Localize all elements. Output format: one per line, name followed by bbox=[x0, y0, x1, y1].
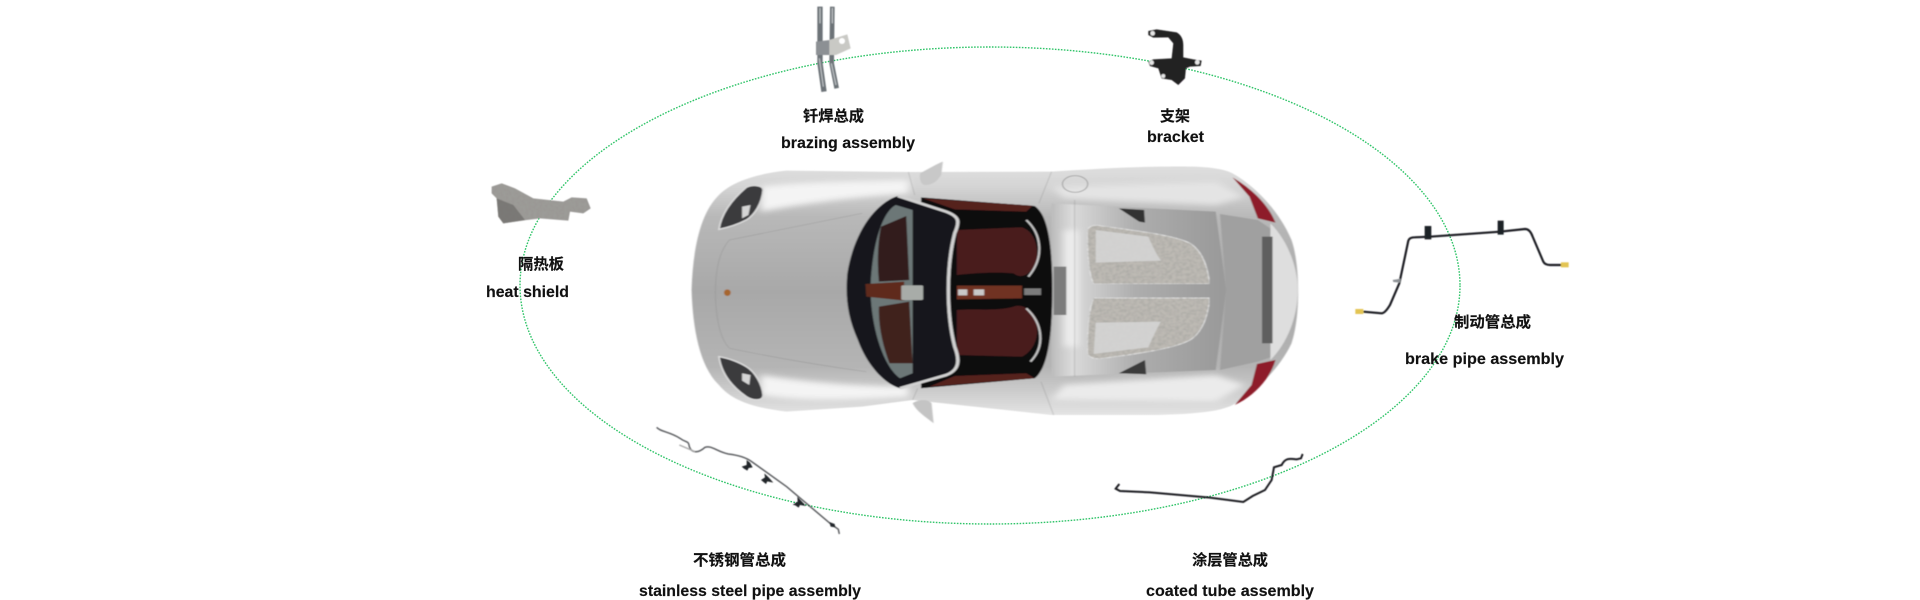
side clip bbox=[1393, 279, 1401, 283]
mounting tab bbox=[829, 34, 851, 55]
label: stainless steel pipe assembly: stainless steel pipe assembly bbox=[639, 583, 861, 600]
pipe run bbox=[1363, 229, 1562, 313]
bottom tail light bbox=[1235, 360, 1276, 405]
rear grille bbox=[1262, 237, 1273, 343]
red sill strips bbox=[923, 198, 1035, 387]
part: bracket bbox=[1148, 29, 1202, 85]
top headlight lens bbox=[742, 205, 751, 218]
roll hoop bottom bbox=[1026, 308, 1040, 362]
left connector bbox=[1355, 309, 1363, 314]
part: heat shield bbox=[492, 183, 591, 223]
label: brazing assembly: 钎焊总成 bbox=[803, 105, 864, 126]
shield shading bbox=[497, 198, 525, 223]
bottom headlight bbox=[719, 357, 763, 400]
car: top view sports car bbox=[692, 162, 1298, 423]
pipe branch bbox=[679, 445, 695, 452]
left tube bbox=[820, 7, 824, 92]
label: bracket bbox=[1147, 105, 1205, 146]
windshield glass side bbox=[870, 205, 913, 378]
badge bbox=[724, 289, 731, 296]
rear end bbox=[1270, 223, 1298, 360]
windshield frame bbox=[898, 196, 958, 388]
dotted green orbit ellipse bbox=[520, 47, 1460, 524]
label: brake pipe assembly: brake pipe assembly bbox=[1405, 351, 1564, 368]
right connector bbox=[1561, 262, 1569, 267]
label: brazing assembly bbox=[781, 105, 915, 152]
top seat bbox=[957, 227, 1037, 276]
top mirror bbox=[920, 162, 943, 185]
part: brake pipe bbox=[1355, 221, 1569, 314]
label: brazing assembly: brazing assembly bbox=[781, 135, 915, 152]
centre console bbox=[957, 286, 1022, 299]
label: coated tube assembly: coated tube assembly bbox=[1146, 583, 1314, 600]
top tail light bbox=[1233, 177, 1276, 223]
dash wedge bbox=[865, 282, 904, 301]
label: coated tube assembly: 涂层管总成 bbox=[1192, 549, 1268, 570]
bottom vent bbox=[1087, 298, 1209, 359]
pipe clips bbox=[1425, 221, 1504, 239]
top air slot bbox=[1119, 208, 1145, 223]
cockpit interior bbox=[921, 197, 1052, 388]
label: coated tube assembly bbox=[1146, 549, 1314, 600]
right tube bbox=[832, 7, 837, 88]
label: bracket: bracket bbox=[1147, 129, 1205, 146]
label: heat shield bbox=[486, 253, 569, 301]
rear deck bbox=[1052, 203, 1226, 377]
car body shell bbox=[692, 166, 1298, 415]
part: stainless steel pipe bbox=[657, 427, 839, 534]
label: stainless steel pipe assembly bbox=[639, 549, 861, 600]
hood panel lines bbox=[715, 172, 1075, 415]
shoulder highlights bbox=[761, 180, 1245, 402]
dash instrument bbox=[901, 285, 923, 300]
top vent light bbox=[1096, 230, 1161, 263]
label: brake pipe assembly bbox=[1405, 311, 1564, 368]
label: brake pipe assembly: 制动管总成 bbox=[1454, 311, 1531, 332]
windshield glass bbox=[847, 196, 958, 388]
part: brazing assembly bbox=[816, 7, 851, 92]
bottom mirror bbox=[913, 400, 934, 423]
bottom vent light bbox=[1094, 322, 1161, 354]
shield casting bbox=[492, 183, 591, 223]
pipe clamps bbox=[742, 460, 835, 527]
bracket holes bbox=[1149, 31, 1200, 78]
bottom seat bbox=[957, 306, 1037, 357]
tube highlights bbox=[819, 8, 836, 87]
pipe run bbox=[657, 427, 839, 534]
fuel cap bbox=[1062, 176, 1088, 192]
tube run bbox=[1116, 454, 1303, 502]
bottom air slot bbox=[1119, 360, 1146, 374]
top headlight bbox=[719, 186, 763, 229]
dash reflection bottom bbox=[879, 302, 913, 363]
top vent bbox=[1087, 225, 1209, 284]
mounting clip bbox=[816, 40, 830, 55]
dash reflection top bbox=[878, 216, 909, 282]
label: heat shield: heat shield bbox=[486, 284, 569, 301]
tab hole bbox=[839, 38, 845, 44]
label: stainless steel pipe assembly: 不锈钢管总成 bbox=[693, 549, 786, 570]
label: heat shield: 隔热板 bbox=[518, 253, 564, 274]
rear bulkhead bbox=[1024, 267, 1066, 315]
console switches bbox=[958, 289, 984, 295]
part: coated tube bbox=[1116, 454, 1303, 502]
roll hoop top bbox=[1026, 220, 1039, 277]
bottom headlight lens bbox=[742, 373, 751, 385]
rear bumper bbox=[1220, 214, 1273, 370]
label: bracket: 支架 bbox=[1160, 105, 1190, 126]
bracket plate bbox=[1148, 29, 1202, 85]
